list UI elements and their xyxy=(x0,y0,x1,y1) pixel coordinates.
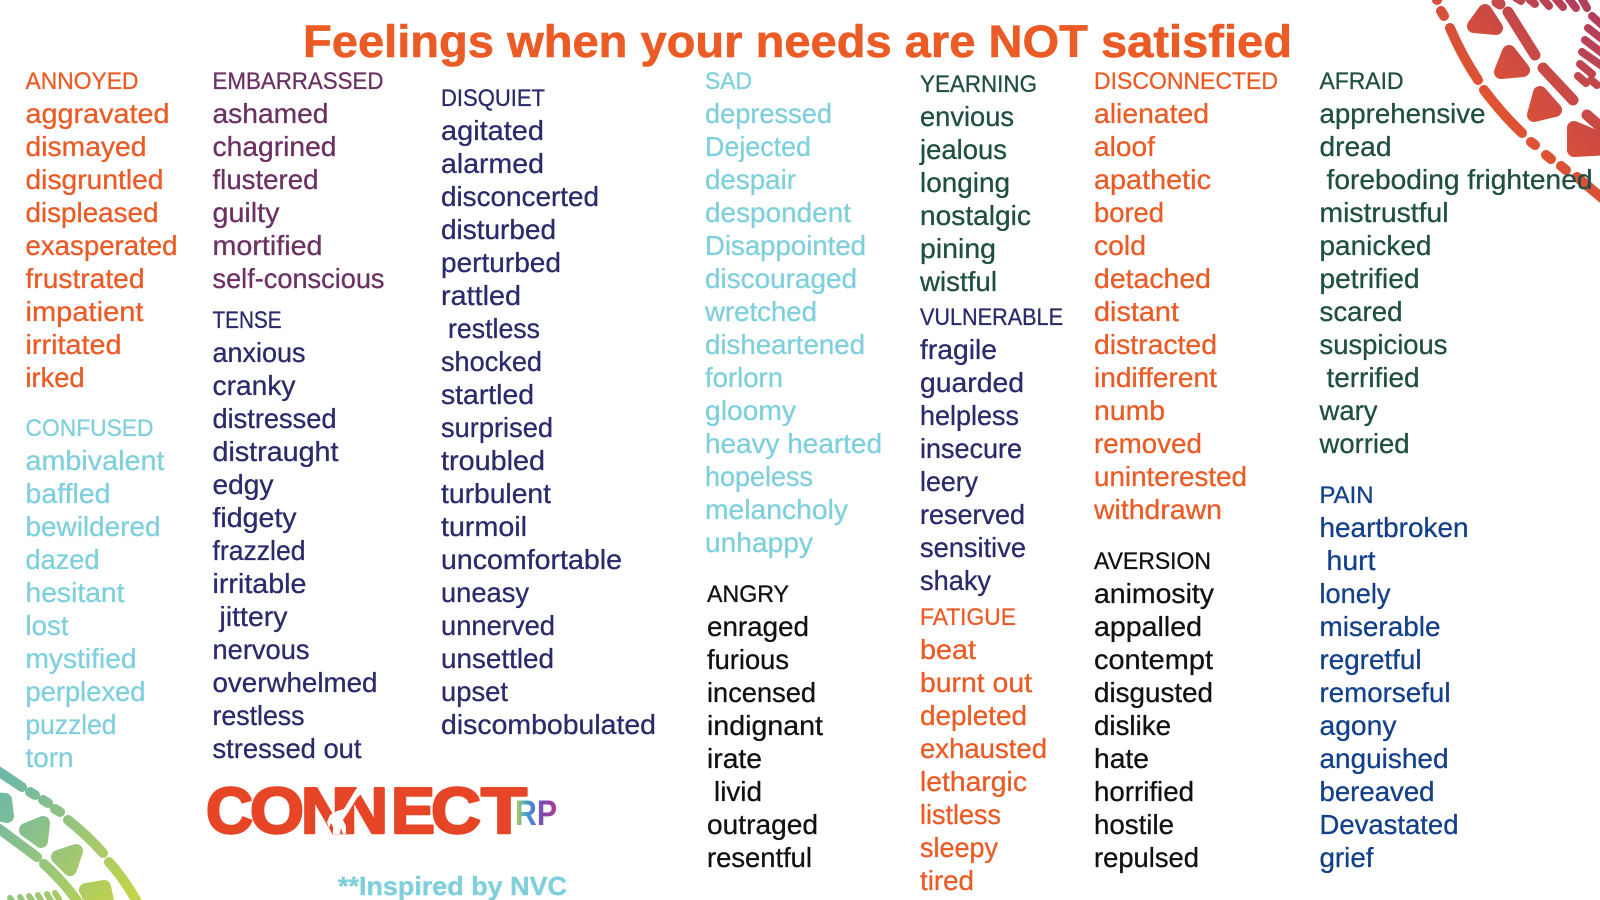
word list: ANNOYED: impatient xyxy=(26,296,144,327)
feeling group: CONFUSED xyxy=(26,415,165,773)
word list: VULNERABLE: reserved xyxy=(920,499,1025,530)
word list: FATIGUE: depleted xyxy=(920,700,1027,731)
word list: SAD: Dejected xyxy=(705,131,811,162)
word list: PAIN: heartbroken xyxy=(1320,512,1468,543)
heading: EMBARRASSED: EMBARRASSED xyxy=(212,68,384,95)
word list: CONFUSED: bewildered xyxy=(26,511,160,542)
word list: DISQUIET xyxy=(441,115,656,740)
word list: AFRAID: wary xyxy=(1319,395,1378,426)
word list: ANNOYED: irked xyxy=(26,362,84,393)
word list: DISQUIET: alarmed xyxy=(441,148,544,179)
word list: VULNERABLE: fragile xyxy=(920,334,997,365)
heading: AFRAID: AFRAID xyxy=(1320,68,1404,95)
word list: DISQUIET: perturbed xyxy=(441,247,561,278)
word list: DISCONNECTED: detached xyxy=(1094,263,1211,294)
word list: CONFUSED: puzzled xyxy=(26,709,116,740)
word list: PAIN: bereaved xyxy=(1320,776,1434,807)
word list: ANGRY xyxy=(707,611,823,873)
word list: YEARNING xyxy=(919,101,1031,297)
word list: VULNERABLE: leery xyxy=(920,466,978,497)
word list: YEARNING: nostalgic xyxy=(920,200,1031,231)
word list: SAD: despair xyxy=(705,164,796,195)
word list: AVERSION: animosity xyxy=(1094,578,1214,609)
word list: EMBARRASSED: self-conscious xyxy=(212,263,384,294)
word list: EMBARRASSED: ashamed xyxy=(212,98,328,129)
word list: SAD: heavy hearted xyxy=(705,428,882,459)
word list: AFRAID: scared xyxy=(1320,296,1402,327)
word list: TENSE: fidgety xyxy=(212,502,297,533)
word list: AVERSION: appalled xyxy=(1094,611,1202,642)
word list: TENSE: irritable xyxy=(212,568,306,599)
word list: DISQUIET: unsettled xyxy=(441,643,554,674)
word list: CONFUSED: torn xyxy=(26,742,74,773)
logo wordmark: T xyxy=(481,774,527,847)
word list: ANNOYED xyxy=(26,98,178,393)
feeling group: FATIGUE xyxy=(920,604,1047,896)
decoration: bottom-left mandala arc xyxy=(0,771,137,900)
word list: CONFUSED: perplexed xyxy=(26,676,146,707)
word list: DISCONNECTED: removed xyxy=(1094,428,1202,459)
word list: ANGRY: irate xyxy=(707,743,762,774)
word list: FATIGUE: tired xyxy=(920,865,974,896)
word list: ANGRY: resentful xyxy=(707,842,812,873)
word list: DISQUIET: troubled xyxy=(441,445,545,476)
title: Feelings when your needs are NOT satisfied xyxy=(303,16,1292,67)
word list: ANGRY: furious xyxy=(707,644,789,675)
word list: DISCONNECTED: bored xyxy=(1094,197,1164,228)
word list: FATIGUE: beat xyxy=(920,634,976,665)
word list: AVERSION: hostile xyxy=(1094,809,1174,840)
word list: AFRAID: petrified xyxy=(1320,263,1420,294)
word list: FATIGUE: burnt out xyxy=(920,667,1032,698)
word list: CONFUSED xyxy=(26,445,165,773)
word list: ANNOYED: irritated xyxy=(26,329,122,360)
word list: DISCONNECTED: cold xyxy=(1094,230,1146,261)
word list: YEARNING: envious xyxy=(920,101,1014,132)
word list: SAD xyxy=(704,98,882,558)
word list: DISQUIET: disturbed xyxy=(441,214,556,245)
word list: AFRAID: terrified xyxy=(1326,362,1420,393)
word list: AFRAID: apprehensive xyxy=(1320,98,1486,129)
heading: TENSE: TENSE xyxy=(212,307,282,334)
word list: CONFUSED: lost xyxy=(26,610,69,641)
word list: AFRAID: dread xyxy=(1320,131,1392,162)
logo wordmark: O xyxy=(250,774,304,847)
word list: PAIN xyxy=(1320,512,1468,873)
word list: PAIN: anguished xyxy=(1320,743,1448,774)
heading: DISCONNECTED: DISCONNECTED xyxy=(1094,68,1278,95)
word list: AVERSION: disgusted xyxy=(1094,677,1213,708)
word list: AFRAID: worried xyxy=(1319,428,1410,459)
logo wordmark xyxy=(206,774,527,847)
word list: VULNERABLE: shaky xyxy=(920,565,991,596)
word list: ANGRY: indignant xyxy=(707,710,823,741)
feeling group: DISCONNECTED xyxy=(1093,68,1278,525)
word list: ANGRY: livid xyxy=(714,776,762,807)
word list: YEARNING: pining xyxy=(920,233,996,264)
word list: EMBARRASSED xyxy=(212,98,384,294)
word list: FATIGUE: listless xyxy=(920,799,1001,830)
word list: TENSE: anxious xyxy=(212,337,306,368)
word list: ANNOYED: displeased xyxy=(26,197,158,228)
heading: PAIN: PAIN xyxy=(1320,482,1374,509)
word list: SAD: despondent xyxy=(705,197,851,228)
word list: TENSE xyxy=(212,337,378,764)
word list: SAD: forlorn xyxy=(705,362,783,393)
logo wordmark: N xyxy=(340,774,388,847)
word list: AVERSION xyxy=(1094,578,1214,873)
word list: AVERSION: contempt xyxy=(1094,644,1213,675)
word list: YEARNING: longing xyxy=(920,167,1010,198)
word list: DISCONNECTED: alienated xyxy=(1094,98,1209,129)
logo wordmark: N xyxy=(301,774,349,847)
heading: ANNOYED: ANNOYED xyxy=(26,68,138,95)
word list: FATIGUE: sleepy xyxy=(920,832,998,863)
word list: AVERSION: horrified xyxy=(1094,776,1194,807)
word list: SAD: disheartened xyxy=(705,329,865,360)
word list: AFRAID: suspicious xyxy=(1320,329,1448,360)
word list: CONFUSED: hesitant xyxy=(26,577,125,608)
word list: TENSE: edgy xyxy=(212,469,274,500)
word list: SAD: gloomy xyxy=(705,395,796,426)
word list: DISCONNECTED: indifferent xyxy=(1094,362,1217,393)
word list: VULNERABLE: helpless xyxy=(920,400,1019,431)
feeling group: ANGRY xyxy=(707,581,823,873)
logo wordmark: C xyxy=(206,774,253,847)
word list: SAD: discouraged xyxy=(705,263,857,294)
heading: CONFUSED: CONFUSED xyxy=(26,415,154,442)
logo wordmark: E xyxy=(391,774,435,847)
word list: CONFUSED: ambivalent xyxy=(26,445,165,476)
word list: AFRAID: foreboding frightened xyxy=(1326,164,1592,195)
feeling group: SAD xyxy=(704,68,882,558)
word list: TENSE: restless xyxy=(212,700,304,731)
word list: AFRAID: panicked xyxy=(1320,230,1432,261)
heading: DISQUIET: DISQUIET xyxy=(441,85,545,112)
heading: ANGRY: ANGRY xyxy=(707,581,789,608)
word list: DISQUIET: uneasy xyxy=(441,577,529,608)
word list: DISQUIET: unnerved xyxy=(441,610,555,641)
word list: ANNOYED: aggravated xyxy=(26,98,170,129)
word list: ANNOYED: exasperated xyxy=(26,230,178,261)
word list: AVERSION: repulsed xyxy=(1094,842,1199,873)
word list: AFRAID: mistrustful xyxy=(1320,197,1448,228)
word list: DISCONNECTED: uninterested xyxy=(1094,461,1247,492)
word list: YEARNING: wistful xyxy=(919,266,997,297)
word list: DISCONNECTED: aloof xyxy=(1094,131,1155,162)
word list: FATIGUE xyxy=(920,634,1047,896)
word list: ANGRY: outraged xyxy=(707,809,818,840)
feeling group: ANNOYED xyxy=(26,68,178,393)
word list: TENSE: frazzled xyxy=(212,535,306,566)
word list: TENSE: stressed out xyxy=(212,733,362,764)
word list: EMBARRASSED: mortified xyxy=(212,230,322,261)
feeling group: TENSE xyxy=(212,307,378,764)
icon: giraffe silhouette xyxy=(327,789,364,834)
word list: EMBARRASSED: guilty xyxy=(212,197,280,228)
word list: AFRAID xyxy=(1319,98,1592,459)
word list: VULNERABLE: guarded xyxy=(920,367,1024,398)
word list: DISQUIET: turmoil xyxy=(441,511,527,542)
word list: EMBARRASSED: chagrined xyxy=(212,131,336,162)
word list: SAD: hopeless xyxy=(705,461,813,492)
word list: EMBARRASSED: flustered xyxy=(212,164,318,195)
feeling group: EMBARRASSED xyxy=(212,68,384,294)
column 4: sad and angry xyxy=(704,68,882,873)
word list: DISQUIET: turbulent xyxy=(441,478,551,509)
feeling group: PAIN xyxy=(1320,482,1468,873)
word list: DISCONNECTED xyxy=(1093,98,1247,525)
word list: DISQUIET: uncomfortable xyxy=(441,544,622,575)
heading: FATIGUE: FATIGUE xyxy=(920,604,1016,631)
word list: DISCONNECTED: distracted xyxy=(1094,329,1217,360)
column 2: embarrassed and tense xyxy=(212,68,384,764)
word list: PAIN: hurt xyxy=(1326,545,1376,576)
word list: SAD: unhappy xyxy=(705,527,813,558)
column 7: afraid and pain xyxy=(1319,68,1592,873)
word list: DISCONNECTED: apathetic xyxy=(1094,164,1211,195)
word list: ANGRY: enraged xyxy=(707,611,809,642)
feeling group: VULNERABLE xyxy=(920,304,1063,596)
word list: PAIN: miserable xyxy=(1320,611,1440,642)
logo suffix: RP: RP xyxy=(515,794,557,833)
logo wordmark: C xyxy=(431,774,481,847)
word list: SAD: wretched xyxy=(704,296,817,327)
word list: TENSE: overwhelmed xyxy=(212,667,378,698)
feeling group: AVERSION xyxy=(1094,548,1214,873)
word list: CONFUSED: baffled xyxy=(26,478,111,509)
word list: DISQUIET: surprised xyxy=(441,412,553,443)
word list: AVERSION: dislike xyxy=(1094,710,1171,741)
feeling group: YEARNING xyxy=(919,71,1037,297)
column 1: annoyed and confused xyxy=(26,68,178,773)
word list: DISQUIET: restless xyxy=(448,313,540,344)
word list: VULNERABLE xyxy=(920,334,1026,596)
word list: TENSE: distraught xyxy=(212,436,339,467)
feeling group: AFRAID xyxy=(1319,68,1592,459)
word list: SAD: depressed xyxy=(705,98,832,129)
word list: ANGRY: incensed xyxy=(707,677,816,708)
word list: CONFUSED: dazed xyxy=(26,544,100,575)
heading: SAD: SAD xyxy=(705,68,752,95)
word list: ANNOYED: frustrated xyxy=(26,263,144,294)
word list: TENSE: jittery xyxy=(218,601,288,632)
word list: PAIN: regretful xyxy=(1320,644,1422,675)
word list: DISCONNECTED: numb xyxy=(1094,395,1165,426)
column 3: disquiet xyxy=(441,85,656,740)
word list: TENSE: nervous xyxy=(212,634,310,665)
word list: DISQUIET: startled xyxy=(441,379,534,410)
word list: DISQUIET: rattled xyxy=(441,280,521,311)
word list: FATIGUE: lethargic xyxy=(920,766,1027,797)
word list: DISQUIET: agitated xyxy=(441,115,544,146)
word list: DISQUIET: discombobulated xyxy=(441,709,656,740)
column 5: yearning, vulnerable and fatigue xyxy=(919,71,1063,896)
word list: ANNOYED: disgruntled xyxy=(26,164,164,195)
word list: PAIN: remorseful xyxy=(1320,677,1450,708)
word list: PAIN: Devastated xyxy=(1320,809,1458,840)
word list: SAD: Disappointed xyxy=(705,230,866,261)
column 6: disconnected and aversion xyxy=(1093,68,1278,873)
word list: VULNERABLE: insecure xyxy=(920,433,1022,464)
word list: VULNERABLE: sensitive xyxy=(920,532,1026,563)
word list: FATIGUE: exhausted xyxy=(920,733,1047,764)
word list: TENSE: cranky xyxy=(212,370,296,401)
word list: PAIN: lonely xyxy=(1320,578,1391,609)
word list: DISCONNECTED: withdrawn xyxy=(1093,494,1222,525)
decoration: top-right mandala arc xyxy=(1437,0,1600,198)
word list: TENSE: distressed xyxy=(212,403,336,434)
heading: YEARNING: YEARNING xyxy=(920,71,1037,98)
word list: DISQUIET: upset xyxy=(441,676,508,707)
word list: PAIN: grief xyxy=(1320,842,1374,873)
word list: AVERSION: hate xyxy=(1094,743,1149,774)
word list: DISCONNECTED: distant xyxy=(1094,296,1179,327)
word list: CONFUSED: mystified xyxy=(26,643,136,674)
word list: DISQUIET: disconcerted xyxy=(441,181,599,212)
word list: SAD: melancholy xyxy=(705,494,848,525)
word list: ANNOYED: dismayed xyxy=(26,131,146,162)
heading: AVERSION: AVERSION xyxy=(1094,548,1211,575)
word list: YEARNING: jealous xyxy=(919,134,1007,165)
heading: VULNERABLE: VULNERABLE xyxy=(920,304,1063,331)
word list: PAIN: agony xyxy=(1320,710,1397,741)
word list: DISQUIET: shocked xyxy=(441,346,542,377)
logo: ConnectRP xyxy=(206,774,557,847)
